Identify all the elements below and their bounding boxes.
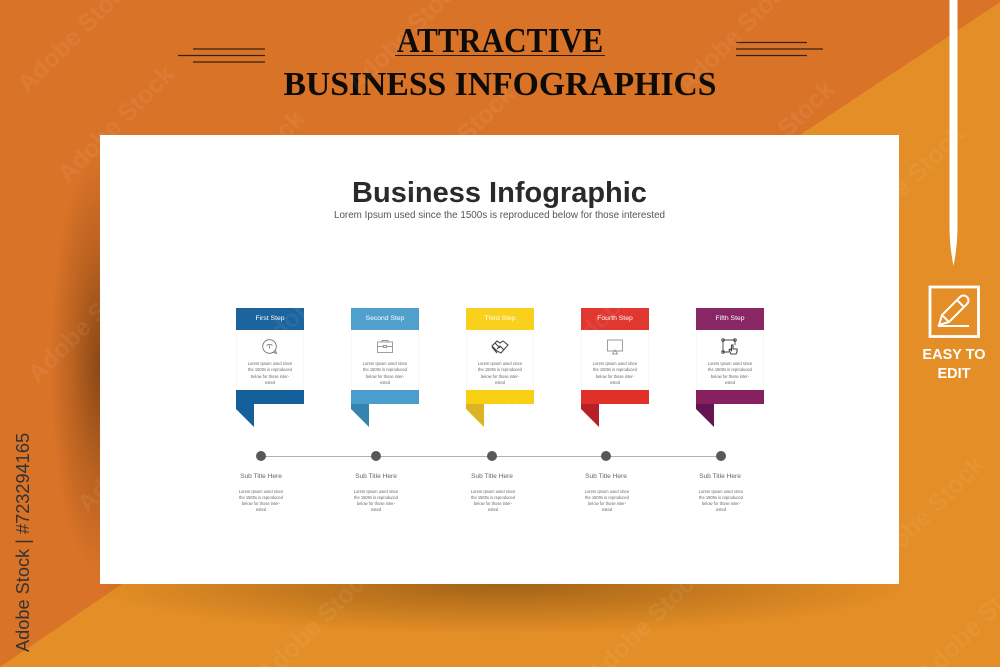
- icon: handshake: [491, 340, 509, 354]
- card: first step: Lorem Ipsum used since: [248, 361, 292, 366]
- timeline line: [261, 456, 721, 457]
- watermarks: Adobe Stock: [402, 390, 530, 518]
- card: first step: [236, 308, 304, 427]
- subtitle 5: Sub Title Here: [699, 473, 741, 480]
- card: third step: Third Step: [484, 315, 516, 322]
- watermarks: Adobe Stock: [182, 105, 310, 233]
- text 2: the 1500s is reproduced: [354, 495, 398, 500]
- text 2: Lorem Ipsum used since: [354, 488, 398, 494]
- card: fourth step: below for those inter-: [596, 374, 634, 379]
- watermarks: Adobe Stock: [562, 230, 690, 358]
- card: second step: Second Step: [366, 315, 404, 322]
- card: fifth step: Fifth Step: [715, 315, 745, 322]
- icon: briefcase: [377, 340, 393, 353]
- card: third step: ested: [495, 380, 505, 385]
- text 4: ested: [602, 507, 612, 512]
- icon: hand selection: [721, 338, 738, 354]
- timeline dot 2: [371, 451, 381, 461]
- text 1: [239, 488, 284, 512]
- card: first step: the 1500s is reproduced: [248, 367, 292, 372]
- text 5: Lorem Ipsum used since: [699, 488, 743, 494]
- watermarks: Adobe Stock: [722, 380, 850, 508]
- text 5: ested: [716, 507, 726, 512]
- watermarks: Adobe Stock: [192, 450, 320, 578]
- panel shadow: bottom: [100, 584, 900, 639]
- text 3: Lorem Ipsum used since: [471, 488, 515, 494]
- text 5: the 1500s is reproduced: [699, 495, 743, 500]
- card: second step: the 1500s is reproduced: [363, 367, 407, 372]
- subtitle 1: Sub Title Here: [240, 473, 282, 480]
- timeline dot 3: [487, 451, 497, 461]
- watermarks: Adobe Stock: [72, 390, 200, 518]
- panel subheading: Lorem Ipsum used since the 1500s is reproduced below for those interested: [334, 210, 665, 221]
- card: second step: below for those inter-: [366, 374, 404, 379]
- easy to edit label: [922, 347, 986, 382]
- card: second step: [351, 308, 419, 427]
- watermarks: Adobe Stock: [252, 230, 380, 358]
- card: third step: Lorem Ipsum used since: [478, 361, 522, 366]
- panel shadow: left: [30, 150, 100, 580]
- panel heading: Business Infographic: [352, 177, 647, 209]
- card: first step: below for those inter-: [251, 374, 289, 379]
- icon: chat bubble: [262, 339, 278, 354]
- title: attractive: ATTRACTIVE: [397, 21, 603, 60]
- text 4: [585, 488, 630, 512]
- text 4: Lorem Ipsum used since: [585, 488, 629, 494]
- white stripe top right: [950, 0, 958, 266]
- watermarks: Adobe Stock: [22, 260, 150, 388]
- card: first step: First Step: [255, 315, 285, 322]
- card: fourth step: ested: [610, 380, 620, 385]
- watermarks: Adobe Stock: [522, 450, 650, 578]
- subtitle 3: Sub Title Here: [471, 473, 513, 480]
- card: fifth step: [696, 308, 764, 427]
- icon: edit pencil: [928, 286, 980, 338]
- watermarks: Adobe Stock: [862, 450, 990, 578]
- icon: monitor: [607, 340, 623, 354]
- text 1: the 1500s is reproduced: [239, 495, 283, 500]
- card: fourth step: the 1500s is reproduced: [593, 367, 637, 372]
- card: third step: the 1500s is reproduced: [478, 367, 522, 372]
- card: second step: ested: [380, 380, 390, 385]
- easy to edit label: EASY TO: [922, 347, 986, 363]
- text 4: below for those inter-: [588, 501, 626, 506]
- card: third step: below for those inter-: [481, 374, 519, 379]
- subtitle 2: Sub Title Here: [355, 473, 397, 480]
- text 1: Lorem Ipsum used since: [239, 488, 283, 494]
- subtitle 4: Sub Title Here: [585, 473, 627, 480]
- decorative lines right: [736, 42, 823, 56]
- text 3: the 1500s is reproduced: [471, 495, 515, 500]
- easy to edit label: EDIT: [937, 366, 971, 382]
- text 2: below for those inter-: [357, 501, 395, 506]
- title underline: [395, 55, 605, 56]
- card: fifth step: Lorem Ipsum used since: [708, 361, 752, 366]
- text 5: below for those inter-: [702, 501, 740, 506]
- text 3: below for those inter-: [474, 501, 512, 506]
- text 3: [471, 488, 516, 512]
- card: fourth step: Lorem Ipsum used since: [593, 361, 637, 366]
- card: fourth step: Fourth Step: [597, 315, 633, 322]
- card: fourth step: [581, 308, 649, 427]
- watermarks: Adobe Stock: [842, 120, 970, 248]
- timeline dot 4: [601, 451, 611, 461]
- card: fifth step: the 1500s is reproduced: [708, 367, 752, 372]
- watermarks: Adobe Stock: [392, 80, 520, 208]
- watermarks: Adobe Stock: [52, 60, 180, 188]
- card: fifth step: below for those inter-: [711, 374, 749, 379]
- adobe stock id vertical: Adobe Stock | #723294165: [13, 433, 33, 652]
- card: third step: [466, 308, 534, 427]
- watermarks: Adobe Stock: [712, 75, 840, 203]
- text 1: ested: [256, 507, 266, 512]
- text 3: ested: [488, 507, 498, 512]
- card: second step: Lorem Ipsum used since: [363, 361, 407, 366]
- card: first step: ested: [265, 380, 275, 385]
- text 4: the 1500s is reproduced: [585, 495, 629, 500]
- text 2: [354, 488, 398, 512]
- title: business infographics: BUSINESS INFOGRAPHICS: [283, 66, 717, 103]
- main panel: [100, 135, 899, 584]
- text 5: [699, 488, 744, 512]
- card: fifth step: ested: [725, 380, 735, 385]
- text 1: below for those inter-: [242, 501, 280, 506]
- text 2: ested: [371, 507, 381, 512]
- decorative lines left: [178, 48, 265, 63]
- timeline dot 5: [716, 451, 726, 461]
- timeline dot 1: [256, 451, 266, 461]
